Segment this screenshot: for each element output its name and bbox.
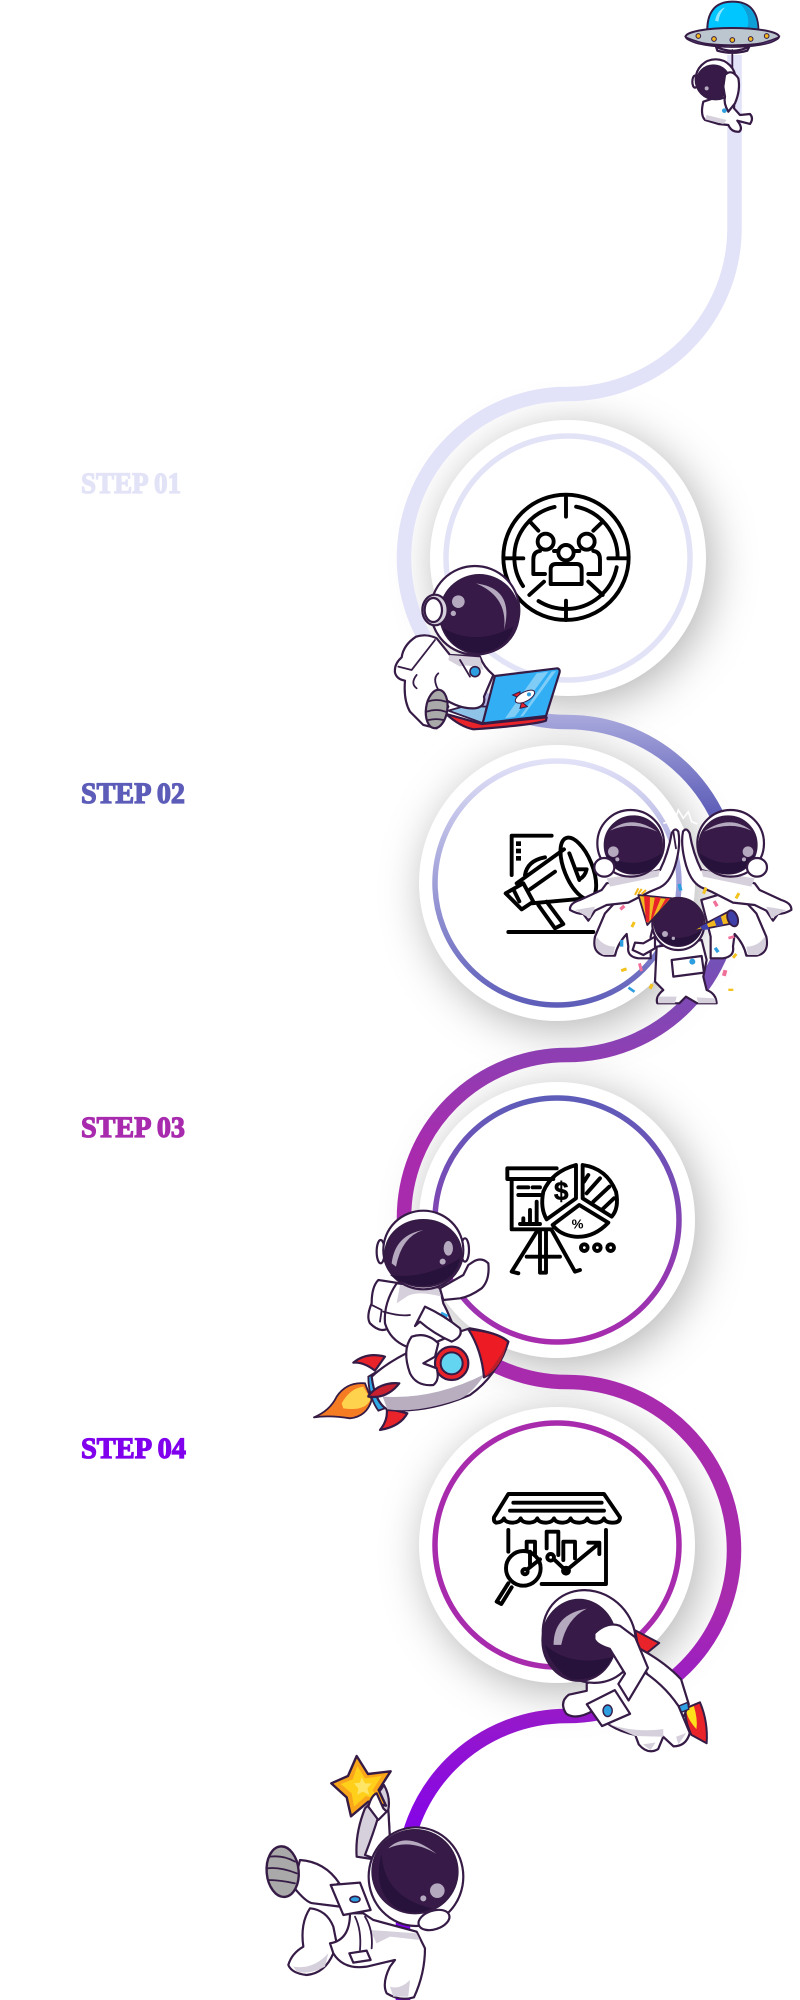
illustration: astronaut riding rocket <box>314 1211 508 1430</box>
illustration: ufo with hanging astronaut <box>686 2 779 132</box>
illustration: astronaut holding star <box>265 1756 463 1999</box>
heading: step 03: STEP 03 <box>81 1111 185 1144</box>
right astronaut <box>682 810 791 958</box>
small party astronaut <box>633 888 740 1003</box>
ring: step 3 <box>435 1098 679 1342</box>
icon: financial pie chart board: % <box>572 1217 584 1232</box>
icon: shop analytics <box>494 1494 620 1604</box>
illustration: high-five astronauts <box>570 810 791 1003</box>
sparkle <box>663 810 697 824</box>
ring: step 1 <box>446 436 690 680</box>
panel disc: step 3 <box>419 1082 695 1358</box>
icon: financial pie chart board <box>507 1165 617 1273</box>
icon: megaphone on board <box>506 833 604 932</box>
panel disc: step 4 <box>419 1407 695 1683</box>
left astronaut <box>570 810 679 958</box>
illustration: astronaut with laptop <box>395 566 560 730</box>
heading: step 01: STEP 01 <box>81 467 181 500</box>
panel disc: step 2 <box>419 745 695 1021</box>
panel disc: step 1 <box>430 420 706 696</box>
ring: step 2 <box>435 761 679 1005</box>
confetti <box>619 884 740 993</box>
ring: step 4 <box>435 1423 679 1667</box>
heading: step 04: STEP 04 <box>81 1432 186 1465</box>
star <box>331 1756 391 1816</box>
icon: target audience <box>503 495 629 620</box>
heading: step 02: STEP 02 <box>81 777 185 810</box>
winding path <box>403 55 734 2000</box>
illustration: astronaut with jetpack <box>533 1585 707 1751</box>
icon: financial pie chart board: $ <box>554 1176 569 1206</box>
